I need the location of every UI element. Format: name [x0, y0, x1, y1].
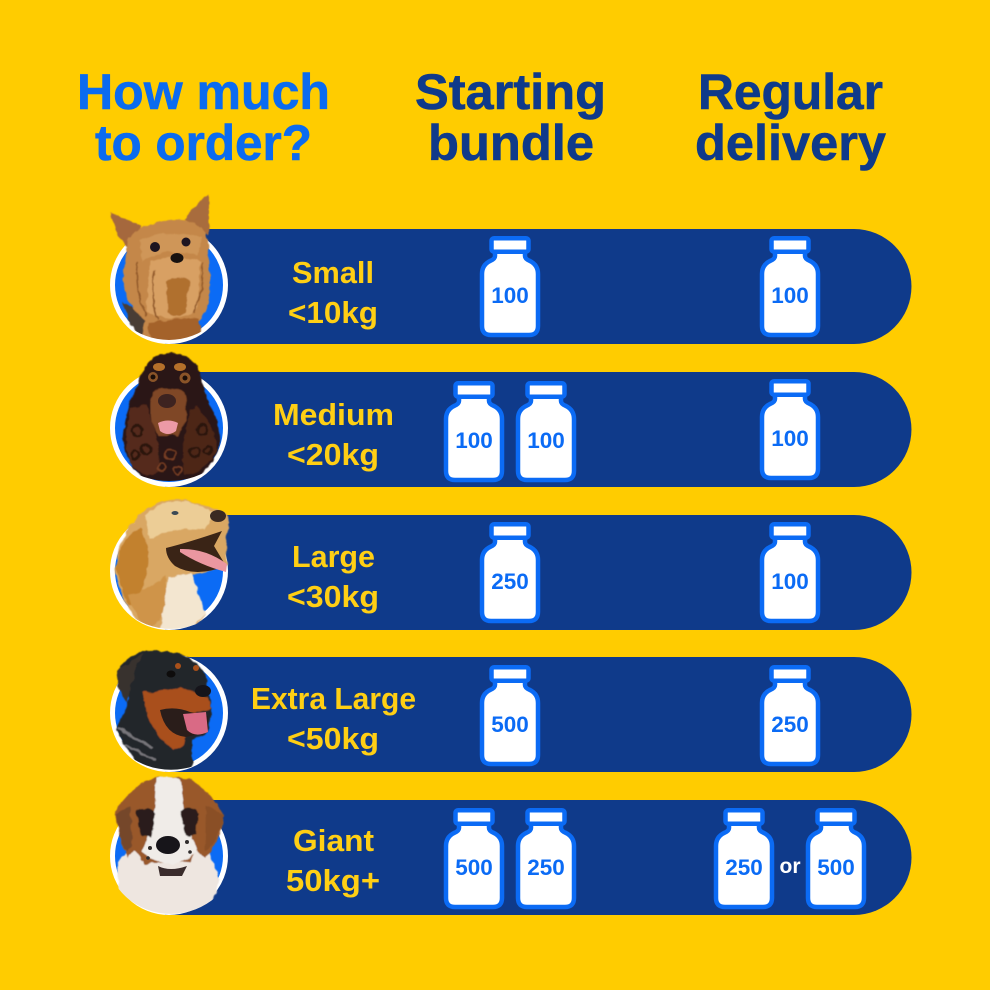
label: extra large: Extra Large: [251, 681, 416, 716]
bottle: small regular 100: [762, 238, 818, 335]
row: giant: [112, 777, 911, 918]
heading: regular delivery: delivery: [695, 115, 886, 171]
row: small: [110, 194, 911, 345]
label: small: Small: [292, 255, 374, 290]
heading: how much to order: How much: [77, 64, 330, 120]
bottle: medium starting 100 b: 100: [527, 428, 565, 453]
badge: [112, 656, 226, 770]
bottle: giant regular 500: [808, 810, 864, 907]
row: large: [112, 499, 911, 632]
label: small: <10kg: [288, 295, 378, 330]
bottle: giant starting 500: 500: [455, 855, 493, 880]
heading: starting bundle: bundle: [428, 115, 594, 171]
heading: how much to order: [77, 64, 330, 171]
dog: rottweiler: [116, 651, 212, 775]
label: medium: Medium: [273, 397, 394, 432]
dog: cocker spaniel: [123, 353, 220, 482]
label: large: Large: [292, 539, 375, 574]
bar: [165, 657, 911, 772]
bottle: medium starting 100 b: [518, 383, 574, 480]
bottle: large starting 250: [482, 524, 538, 621]
dog: saint bernard: [115, 777, 224, 918]
heading: regular delivery: Regular: [698, 64, 883, 120]
dog: golden retriever: [115, 499, 228, 632]
heading: regular delivery: [695, 64, 886, 171]
label: giant: [286, 823, 380, 898]
label: extra large: <50kg: [287, 721, 379, 756]
label: small: [288, 255, 378, 330]
bottle: giant starting 500: [446, 810, 502, 907]
bottle: small regular 100: 100: [771, 283, 809, 308]
heading: starting bundle: [415, 64, 606, 171]
badge: [112, 800, 226, 912]
label: large: <30kg: [287, 579, 379, 614]
bottle: extra large regular 250: 250: [771, 712, 809, 737]
dog: yorkshire terrier: [110, 194, 210, 345]
heading: starting bundle: Starting: [415, 64, 606, 120]
label: medium: <20kg: [287, 437, 379, 472]
badge: [112, 372, 226, 484]
bottle: medium regular 100: [762, 381, 818, 478]
bottle: extra large starting 500: [482, 667, 538, 764]
row: extra large: [112, 651, 911, 775]
label: giant: 50kg+: [286, 863, 380, 898]
bottle: medium starting 100 a: 100: [455, 428, 493, 453]
label: medium: [273, 397, 394, 472]
bottle: giant starting 250: 250: [527, 855, 565, 880]
bar: [165, 800, 911, 915]
bottle: small starting 100: 100: [491, 283, 529, 308]
bottle: giant regular 250: 250: [725, 855, 763, 880]
bottle: giant regular 500: 500: [817, 855, 855, 880]
label: extra large: [251, 681, 416, 756]
bottle: extra large regular 250: [762, 667, 818, 764]
row: medium: [112, 353, 911, 487]
bottle: medium starting 100 a: [446, 383, 502, 480]
bottle: large regular 100: 100: [771, 569, 809, 594]
bottle: large starting 250: 250: [491, 569, 529, 594]
label: giant: Giant: [293, 823, 374, 858]
bottle: large regular 100: [762, 524, 818, 621]
bottle: small starting 100: [482, 238, 538, 335]
bottle: medium regular 100: 100: [771, 426, 809, 451]
heading: how much to order: to order?: [95, 115, 312, 171]
text: or: or: [780, 855, 800, 878]
bottle: extra large starting 500: 500: [491, 712, 529, 737]
bar: [165, 515, 911, 630]
bar: [165, 229, 911, 344]
label: large: [287, 539, 379, 614]
bottle: giant starting 250: [518, 810, 574, 907]
bar: [165, 372, 911, 487]
badge: [112, 228, 226, 342]
bottle: giant regular 250: [716, 810, 772, 907]
badge: [112, 514, 226, 628]
